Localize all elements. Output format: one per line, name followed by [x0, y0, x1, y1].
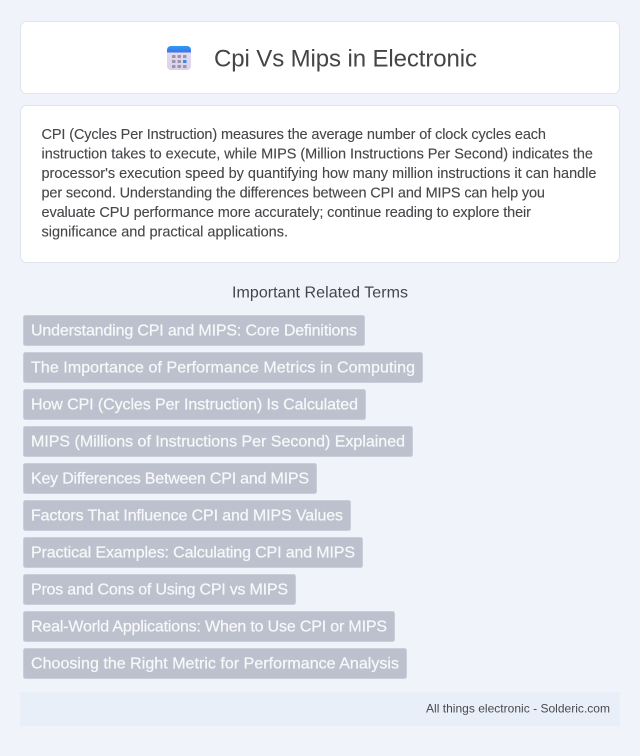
footer: All things electronic - Solderic.com	[426, 702, 610, 716]
tag 7	[24, 538, 362, 568]
header panel	[20, 22, 620, 94]
tag 7: Practical Examples: Calculating CPI and MIPS	[31, 544, 355, 562]
intro text: evaluate CPU performance more accurately; continue reading to explore their	[42, 205, 531, 221]
intro text: CPI (Cycles Per Instruction) measures the average number of clock cycles each	[42, 127, 546, 143]
tag 9	[24, 612, 394, 642]
intro text: processor's execution speed by quantifying how many million instructions it can handle	[42, 166, 596, 182]
tag 3: How CPI (Cycles Per Instruction) Is Calculated	[31, 396, 358, 414]
tag 6: Factors That Influence CPI and MIPS Values	[31, 508, 343, 524]
tag 1: Understanding CPI and MIPS: Core Definitions	[31, 322, 357, 340]
tag 2	[24, 352, 422, 382]
tag 4: MIPS (Millions of Instructions Per Second) Explained	[31, 434, 405, 450]
tag 9: Real-World Applications: When to Use CPI or MIPS	[31, 618, 387, 636]
heading: important related terms: Important Related Terms	[232, 284, 408, 302]
intro text: per second. Understanding the differences between CPI and MIPS can help you	[42, 186, 545, 202]
icon: calendar	[167, 46, 191, 70]
tag 5: Key Differences Between CPI and MIPS	[31, 470, 309, 488]
intro text: instruction takes to execute, while MIPS (Million Instructions Per Second) indicates the	[42, 146, 593, 162]
intro text: significance and practical applications.	[42, 224, 288, 240]
tag 2: The Importance of Performance Metrics in Computing	[31, 360, 415, 376]
tag 5	[24, 464, 316, 494]
tag 8	[24, 574, 296, 604]
footer	[20, 692, 620, 726]
panel: introduction	[20, 106, 620, 262]
tag list	[24, 316, 422, 678]
tag 1	[24, 316, 364, 346]
tag 8: Pros and Cons of Using CPI vs MIPS	[31, 582, 288, 598]
intro text	[42, 127, 596, 240]
tag 4	[24, 426, 412, 456]
tag 3	[24, 390, 366, 420]
tag 6	[24, 500, 350, 530]
tag 10	[24, 648, 406, 678]
tag 10: Choosing the Right Metric for Performance Analysis	[31, 656, 399, 672]
title: Cpi Vs Mips in Electronic	[214, 46, 477, 72]
